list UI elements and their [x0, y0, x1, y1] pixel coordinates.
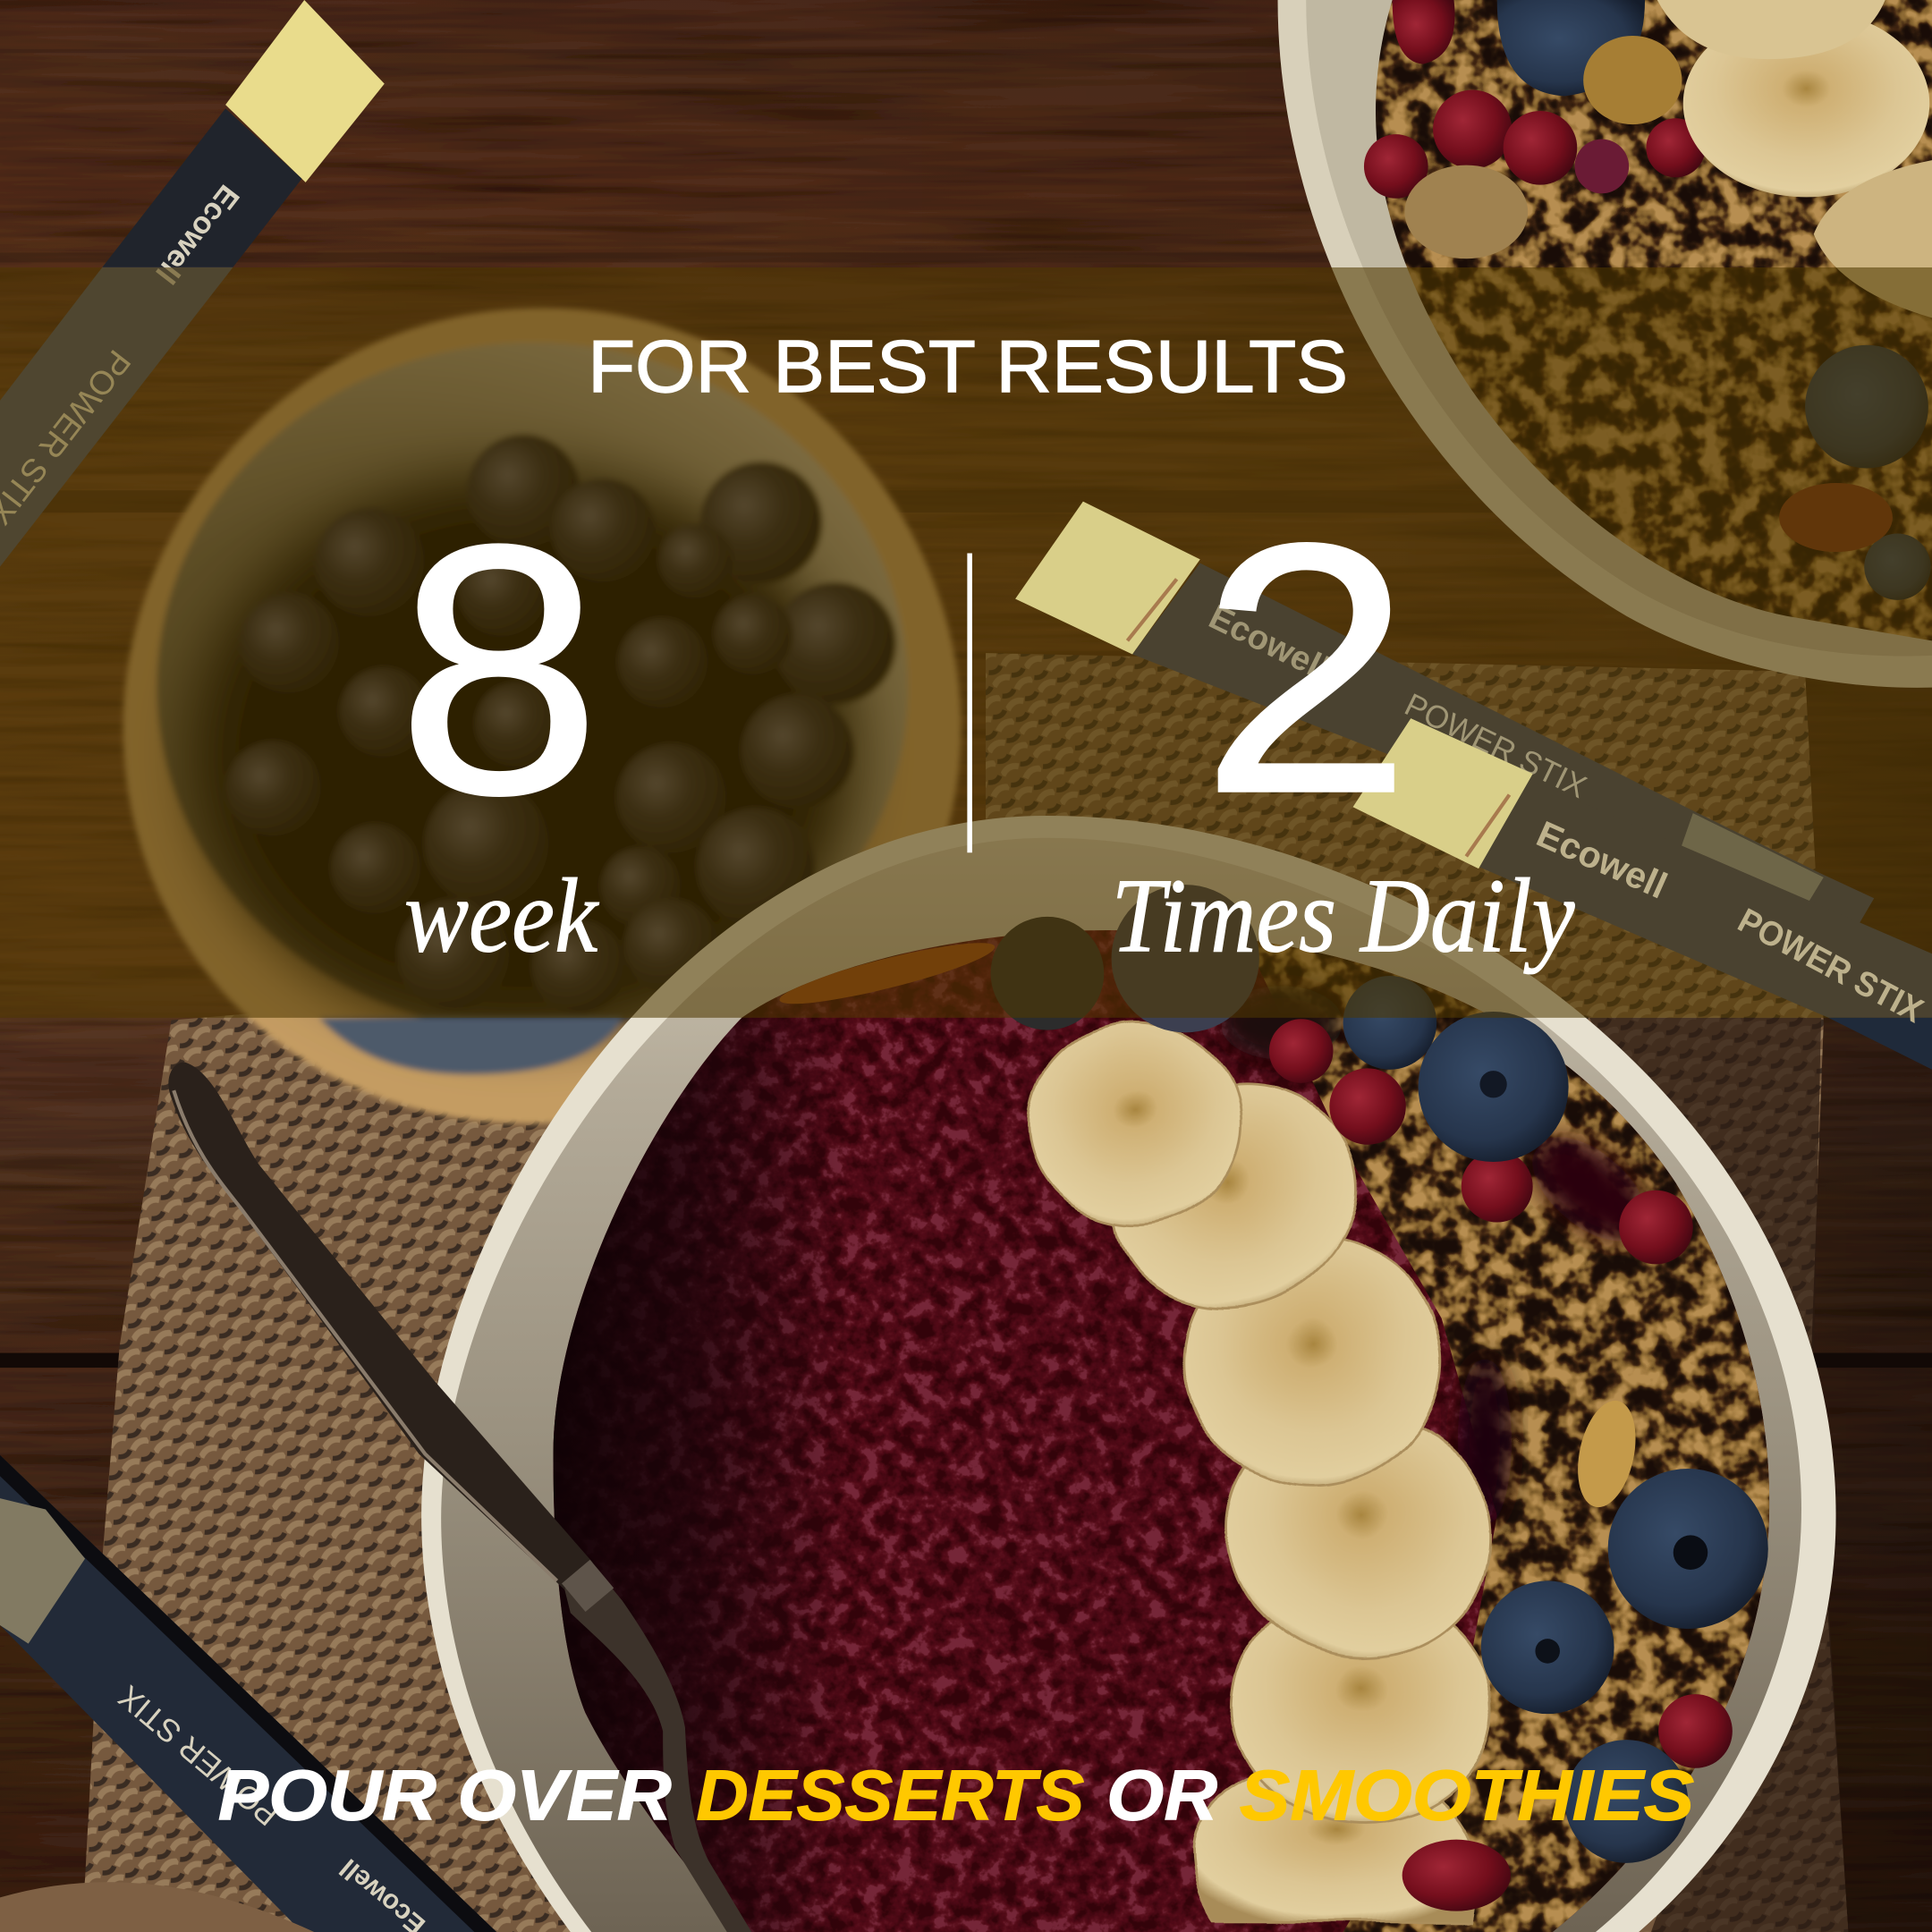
tagline: DESSERTS — [696, 1756, 1084, 1835]
pomegranate seeds — [1269, 1019, 1733, 1911]
stat: 8 week — [397, 472, 601, 974]
heading: for best results: FOR BEST RESULTS — [588, 325, 1348, 408]
bowl inner wall — [1306, 0, 1932, 657]
fresh blueberries — [991, 885, 1768, 1863]
centre power stix sachets — [1015, 502, 1932, 1070]
dark acai patches — [1519, 1118, 1654, 1254]
label week: week — [404, 856, 599, 974]
tagline: SMOOTHIES — [1240, 1756, 1694, 1835]
granola topping — [1233, 911, 1775, 1932]
dark berries and fruit — [1364, 0, 1931, 600]
bowl rim — [123, 308, 961, 1123]
tagline — [218, 1756, 1694, 1835]
sachet lower: Ecowell — [1530, 813, 1674, 907]
wooden bowl corner — [0, 1882, 314, 1932]
bottom-left sachet — [0, 1455, 496, 1932]
bowl underside — [319, 1018, 623, 1074]
sachet upper — [1015, 502, 1874, 934]
bowl rim — [1278, 0, 1932, 688]
orange smear — [780, 943, 995, 1004]
top-left sachet: Ecowell — [148, 178, 246, 290]
sachet lower — [1353, 718, 1932, 1070]
main acai bowl — [168, 816, 1836, 1932]
blueberry bowl (out of focus) — [123, 308, 961, 1123]
banana slices — [1657, 0, 1932, 318]
label times daily: Times Daily — [1112, 856, 1575, 974]
bowl inside wall — [157, 343, 908, 1032]
tagline: POUR OVER — [218, 1756, 672, 1835]
almond — [1569, 1395, 1645, 1513]
bowl inner wall — [441, 838, 1801, 1932]
loose blueberries — [226, 434, 897, 1014]
yellow tear-off tab — [225, 0, 385, 182]
granola filling — [1376, 0, 1932, 640]
top-right granola bowl — [1278, 0, 1932, 688]
spoon — [168, 1062, 751, 1932]
bottom-left sachet: POWER STIX — [112, 1678, 285, 1833]
banana slices — [1029, 1022, 1525, 1922]
dark shadow inside — [197, 474, 851, 1029]
top-left sachet — [0, 0, 385, 567]
bowl rim — [421, 816, 1836, 1932]
tagline: OR — [1106, 1756, 1217, 1835]
woven hessian mat — [80, 653, 1848, 1932]
number 8: 8 — [397, 472, 601, 869]
stat: 2 times daily — [1112, 470, 1575, 974]
number 2: 2 — [1200, 470, 1412, 867]
sachet upper: POWER STIX — [1399, 686, 1592, 805]
sachet upper: Ecowell — [1203, 597, 1335, 689]
divider — [967, 554, 972, 852]
translucent olive band — [0, 267, 1932, 1018]
acai smoothie surface — [542, 911, 1775, 1932]
